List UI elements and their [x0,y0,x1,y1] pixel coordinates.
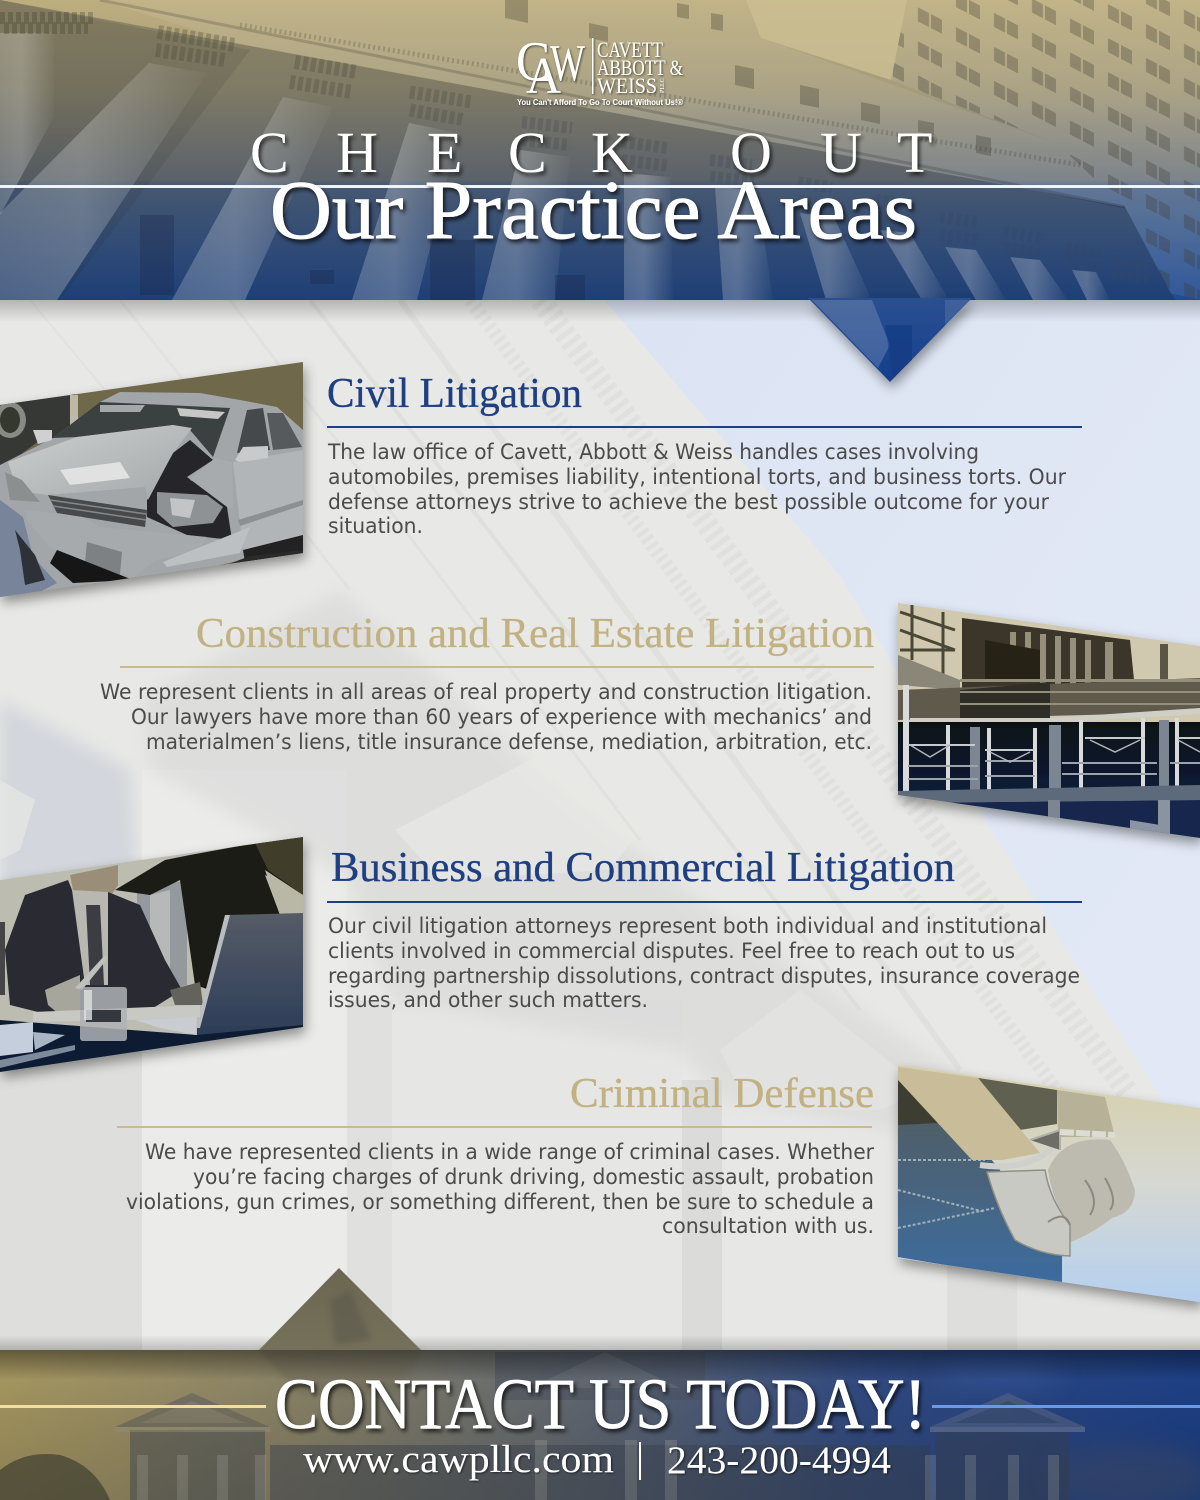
footer rule: right [932,1405,1200,1408]
text: civil litigation: The law office of Cavett, Abbott & Weiss handles cases involving [327,440,979,465]
waist [898,1080,938,1125]
heading: criminal defense: Criminal Defense [570,1071,874,1117]
grille [48,495,147,527]
logo: PLLC [660,78,666,93]
headlight left [5,472,40,502]
jeans [898,1122,1062,1285]
logo: WEISS [597,73,657,98]
entablature [100,0,1125,207]
columns [0,33,54,215]
header rule [0,185,1200,188]
left fist [987,1170,1070,1256]
cuffs [980,1162,1000,1170]
hood [8,425,192,500]
text: civil litigation: defense attorneys strive to achieve the best possible outcome for your [328,490,1049,515]
footer pointer triangle [258,1268,422,1351]
text: criminal defense: you’re facing charges of drunk driving, domestic assault, probation [193,1165,874,1190]
header band: courthouse photo [0,0,1200,300]
photo: handcuffs [898,1062,1200,1304]
footer rule: left [0,1405,266,1408]
tree [0,1454,110,1500]
skyscraper [891,0,1200,300]
title: check out: CHECKOUT [250,120,932,185]
window background [137,882,187,987]
text: business: Our civil litigation attorneys represent both individual and institutional [328,914,1047,939]
capitals [395,755,640,880]
logo: You Can't Afford To Go To Court Without Us!® [517,97,684,107]
footer band: capitol photo [0,1350,1200,1500]
text: construction: materialmen’s liens, title insurance defense, mediation, arbitration, etc. [146,730,872,755]
contact website: www.cawpllc.com [303,1438,614,1481]
arms [898,1067,1040,1160]
upper left scaffold [900,605,955,675]
logo [516,31,684,107]
rule [117,1126,872,1128]
logo: C [516,31,550,93]
heading: construction: Construction and Real Estate Litigation [196,611,874,657]
engine bay [147,440,232,540]
pediments [115,1393,270,1427]
header pointer triangle [808,298,972,382]
table [0,1020,303,1072]
right fist [1048,1139,1135,1242]
bumper [76,516,207,538]
photo: business meeting [0,835,303,1080]
text: civil litigation: situation. [328,514,423,539]
left wreckage [0,500,57,597]
text: business: regarding partnership dissolutions, contract disputes, insurance coverage [328,964,1080,989]
railing level [898,678,1200,720]
entablature moldings [30,300,1130,1095]
header shadow [0,300,1200,322]
laptop [197,913,303,1037]
photo: construction site [898,600,1200,840]
slab [910,708,1200,723]
text: criminal defense: consultation with us. [662,1214,874,1239]
glass [80,987,127,1041]
page background: columns [0,300,1200,1350]
photo: wrecked car [0,360,303,600]
contact phone: 243-200-4994 [667,1439,891,1482]
text: construction: We represent clients in all areas of real property and construction litigation. [100,680,872,705]
sky [746,0,907,80]
capitals [0,18,1152,280]
heading: business: Business and Commercial Litigation [331,845,955,891]
rule [120,666,874,668]
rule [327,901,1082,903]
logo: ABBOTT & [597,55,683,80]
soffit shade [0,0,1175,300]
text: business: clients involved in commercial disputes. Feel free to reach out to us [328,939,1015,964]
right mast [1160,644,1168,679]
hands and pen [45,975,80,1015]
shirt [978,1078,1057,1130]
car body [0,392,303,597]
book [33,1005,200,1022]
lower wall details [140,215,585,300]
logo: CAVETT [597,37,663,62]
clouds [1050,1445,1200,1500]
text: criminal defense: violations, gun crimes, or something different, then be sure to schedule a [126,1190,874,1215]
footer shadow [0,1335,1200,1350]
lower storey [898,722,1200,792]
wings [130,1430,1070,1500]
bottom slab [898,785,1200,803]
divider [639,1442,641,1480]
text: construction: Our lawyers have more than 60 years of experience with mechanics’ and [131,705,872,730]
shadow under entablature [140,590,1000,1140]
text: criminal defense: We have represented clients in a wide range of criminal cases. Whether [145,1140,874,1165]
text: civil litigation: automobiles, premises liability, intentional torts, and business torts. Our [328,465,1066,490]
heading: civil litigation: Civil Litigation [327,371,582,417]
formwork [962,618,1135,690]
text: business: issues, and other such matters. [328,988,648,1013]
title: our practice areas: Our Practice Areas [270,164,917,257]
facade windows [505,0,991,156]
contact heading: CONTACT US TODAY! [275,1364,926,1444]
man in suit [70,865,118,894]
logo: W [550,35,585,92]
central block [495,1352,705,1400]
rule [327,426,1082,428]
rear figure [115,837,303,990]
papers [0,1022,33,1056]
logo: A [526,48,561,105]
